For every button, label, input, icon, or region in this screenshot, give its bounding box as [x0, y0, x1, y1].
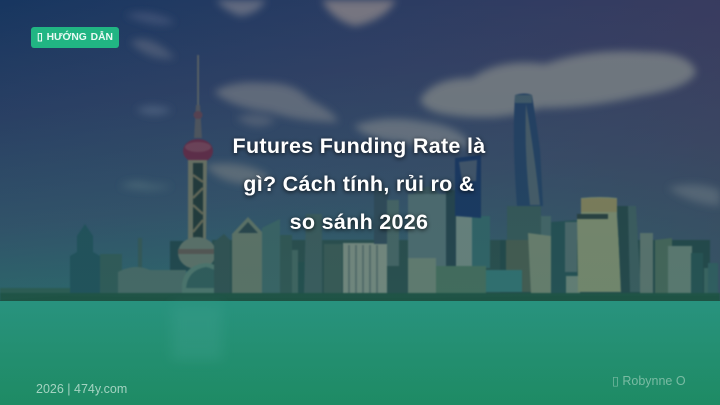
pearl dome — [182, 263, 229, 296]
badge: category tag: ▯ HƯỚNG DẪN — [37, 32, 113, 43]
foreground low — [408, 258, 436, 296]
tree line — [0, 293, 720, 302]
skyline — [0, 55, 720, 304]
title: gì? Cách tính, rủi ro & — [243, 172, 475, 196]
left tower — [70, 224, 100, 298]
footer: author: ▯ Robynne O — [612, 374, 686, 388]
clouds — [120, 0, 720, 206]
low hall — [118, 267, 186, 298]
footer: year and site: 2026 | 474y.com — [36, 382, 127, 396]
central towers — [298, 262, 308, 296]
far buildings — [0, 288, 72, 300]
cylindrical tower — [577, 197, 622, 292]
Shanghai World Financial Center — [455, 155, 481, 218]
title: so sánh 2026 — [290, 210, 428, 234]
title — [231, 134, 487, 234]
dense backdrop — [212, 240, 512, 296]
Oriental Pearl Tower — [197, 55, 199, 107]
badge: category tag — [31, 27, 119, 48]
mid left towers — [214, 234, 230, 296]
Shanghai Tower — [514, 94, 543, 206]
water — [0, 301, 720, 405]
title: Futures Funding Rate là — [233, 134, 485, 158]
base towers right — [507, 206, 541, 262]
